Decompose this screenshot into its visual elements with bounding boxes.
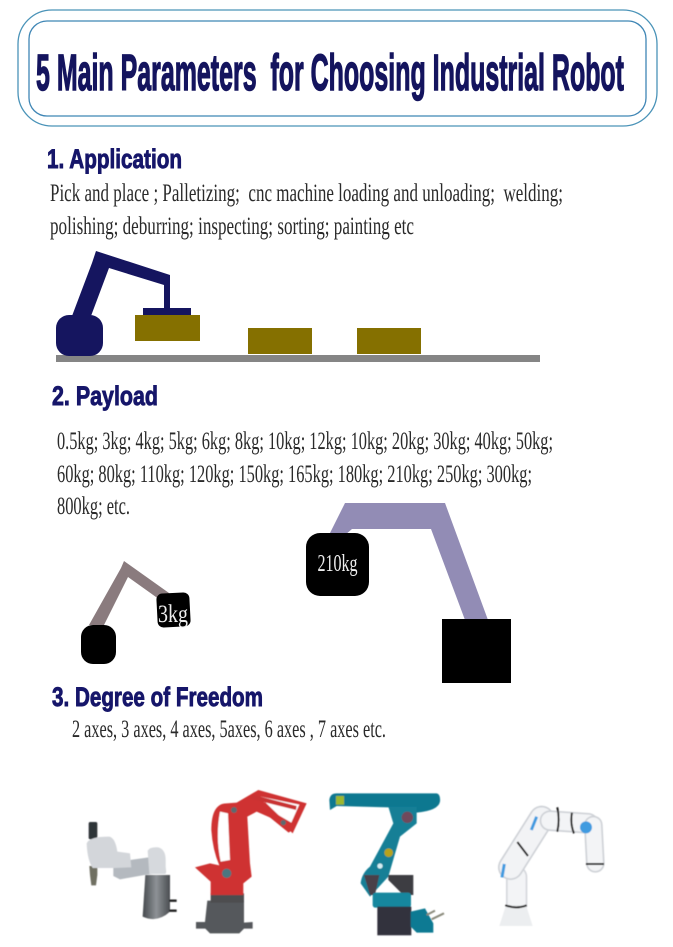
text: payload list: 800kg; etc. (57, 493, 130, 520)
heading: 1. Application: 1. Application (47, 144, 182, 174)
diagram: pick and place robot on a conveyor (56, 251, 540, 362)
diagram: small robot with 3kg payload: 3kg (158, 601, 188, 628)
text: axes list: 2 axes, 3 axes, 4 axes, 5axes, 6 axes , 7 axes etc. (72, 716, 386, 743)
robot photo: teal 6-axis robot (329, 793, 444, 935)
robot photo: SCARA robot (87, 822, 177, 919)
title banner (18, 10, 657, 126)
robot photo: red palletizing robot (195, 790, 307, 933)
diagram: small robot with 3kg payload (81, 561, 191, 664)
text: applications list (50, 180, 563, 240)
text: applications list: polishing; deburring; inspecting; sorting; painting etc (50, 213, 414, 240)
heading: 3. Degree of Freedom: 3. Degree of Freedom (52, 682, 263, 712)
robot photo: white collaborative robot (499, 807, 604, 926)
diagram: large robot with 210kg payload: 210kg (318, 551, 358, 577)
text: payload list (57, 428, 553, 520)
heading: 2. Payload: 2. Payload (52, 381, 158, 411)
diagram: large robot with 210kg payload (306, 503, 511, 683)
